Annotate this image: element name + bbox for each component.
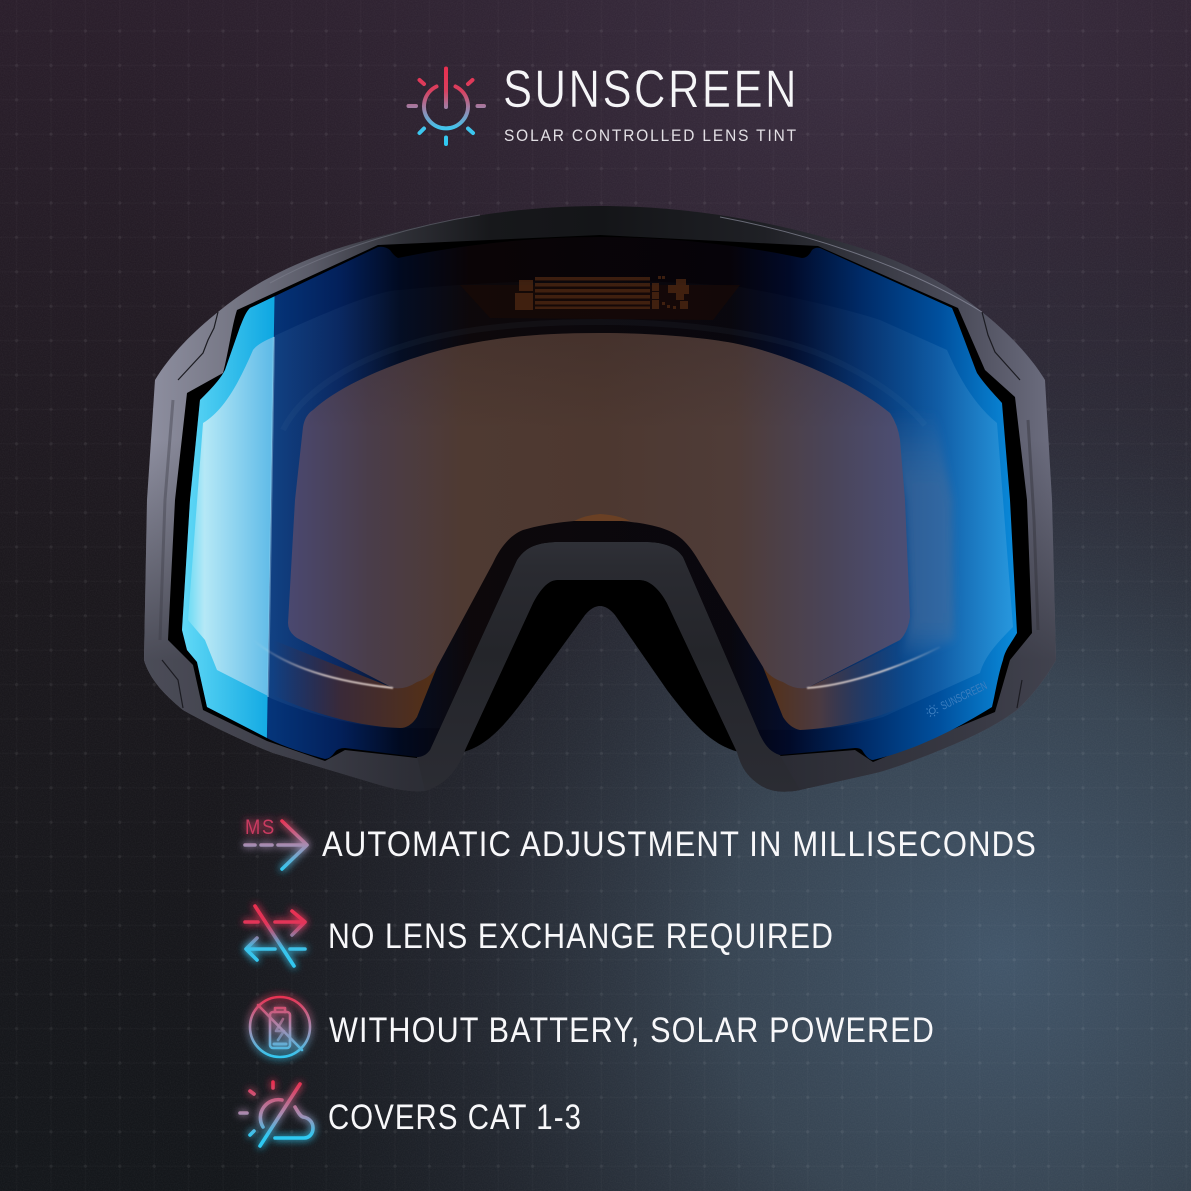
feature: without battery <box>250 997 935 1057</box>
lens highlight left <box>253 640 393 688</box>
solar chip pattern <box>515 276 689 310</box>
icon: MS arrow: MS <box>245 816 276 839</box>
lens wordmark: SUNSCREEN <box>939 680 989 713</box>
nose strap shadow <box>463 560 739 752</box>
feature: automatic adjustment <box>245 816 1037 869</box>
icon: crossed battery <box>250 997 310 1057</box>
lens split edge <box>268 337 274 697</box>
nose bridge orange tip <box>574 514 630 521</box>
feature: covers category <box>240 1082 582 1146</box>
band around viewing window <box>443 319 744 338</box>
brown lower rim left <box>284 645 437 728</box>
lens wordmark <box>924 679 989 720</box>
right textured strip <box>896 424 956 652</box>
black gasket <box>168 235 1032 762</box>
icon: MS arrow <box>245 816 307 869</box>
subtitle: SOLAR CONTROLLED LENS TINT <box>504 127 798 145</box>
feature list <box>240 816 1037 1146</box>
icon: sun and cloud <box>240 1082 313 1146</box>
icon: crossed swap arrows <box>245 906 305 966</box>
inner lens overlay <box>268 281 1013 730</box>
icon: solar power symbol <box>408 68 484 144</box>
brown lower rim right <box>763 649 888 730</box>
viewing window <box>288 333 910 688</box>
lens highlight right <box>807 647 940 688</box>
frame seams and highlights <box>160 215 1038 708</box>
lens <box>170 230 1030 770</box>
feature text: NO LENS EXCHANGE REQUIRED <box>328 917 834 956</box>
feature text: COVERS CAT 1-3 <box>328 1098 582 1137</box>
nose band <box>417 542 800 792</box>
title: SUNSCREEN <box>503 60 799 119</box>
feature text: WITHOUT BATTERY, SOLAR POWERED <box>329 1011 935 1050</box>
feature: no lens exchange <box>245 906 834 966</box>
electronics film backing <box>536 285 740 320</box>
mirrored lens section <box>182 296 274 738</box>
feature text: AUTOMATIC ADJUSTMENT IN MILLISECONDS <box>322 825 1037 864</box>
goggles <box>144 206 1056 792</box>
lens base tint <box>170 230 1030 770</box>
logo header <box>408 60 799 145</box>
frame <box>144 206 1056 792</box>
